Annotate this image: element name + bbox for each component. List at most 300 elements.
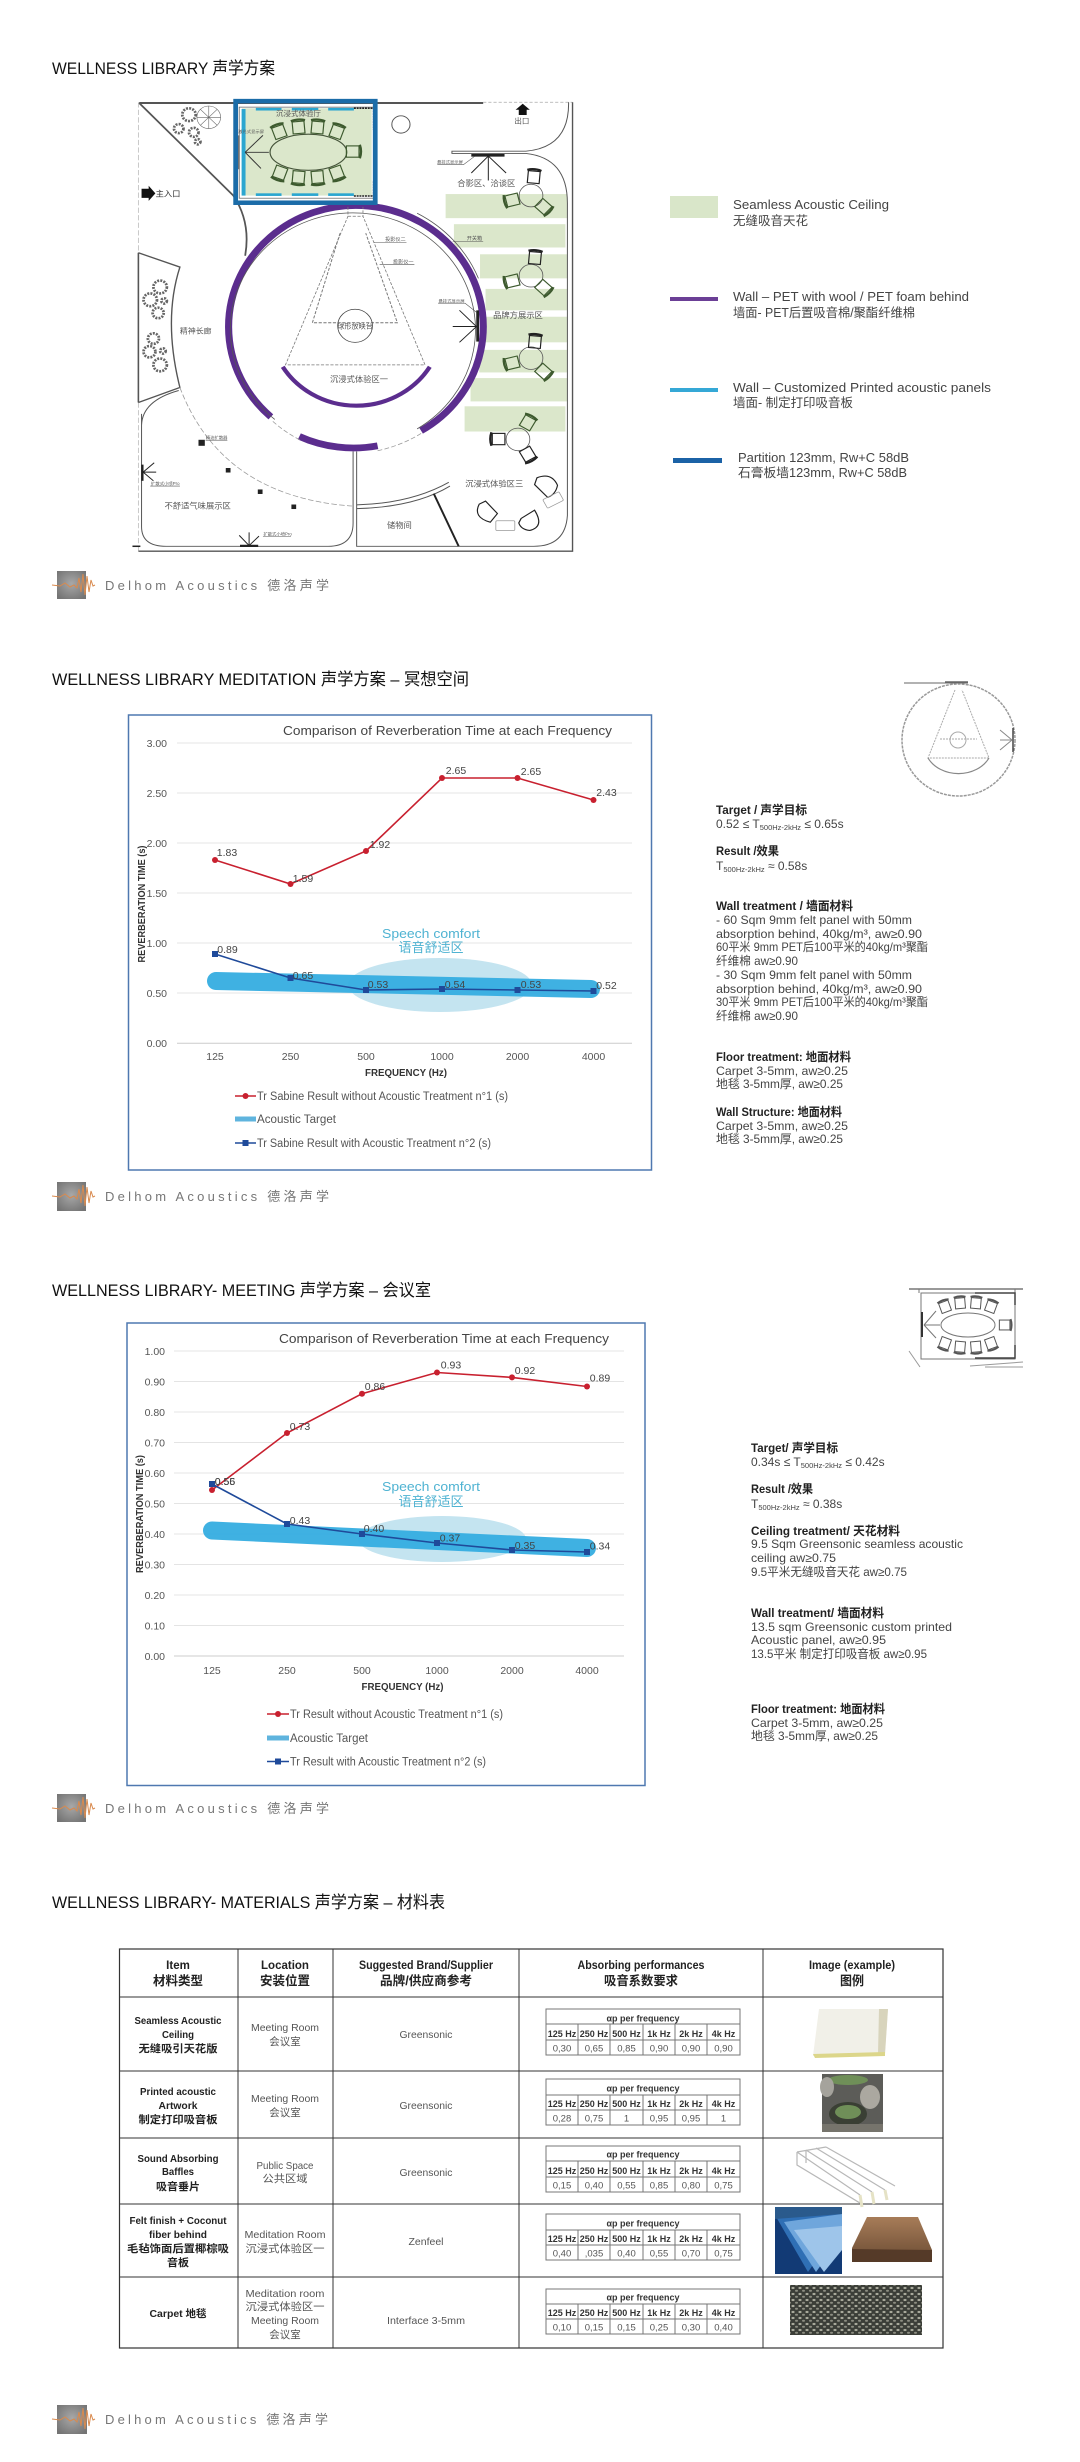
x axis labels: 125 bbox=[203, 1665, 221, 1677]
column: locations: 沉浸式体验区一 bbox=[246, 2300, 325, 2313]
meeting room with blue partition: 激光式显示屏 bbox=[238, 128, 265, 135]
sub-table: printed artwork absorption bbox=[546, 2079, 740, 2125]
table header: Image (example) bbox=[809, 1960, 895, 1972]
column: item names: Baffles bbox=[162, 2166, 194, 2178]
legend item: seamless ceiling: 无缝吸音天花 bbox=[733, 213, 808, 228]
x axis labels: 250 bbox=[278, 1665, 296, 1677]
legend: floor plan materials bbox=[670, 196, 991, 480]
sub-table: printed artwork absorption: 0,95 bbox=[682, 2114, 700, 2124]
text block: meditation specifications: 纤维棉 aw≥0.90 bbox=[716, 1009, 798, 1023]
logo: delhom acoustics 3 bbox=[52, 1794, 329, 1822]
legend item: seamless ceiling bbox=[670, 196, 889, 228]
floor plan room labels: 沉浸式体验区三 bbox=[465, 479, 523, 488]
x axis labels bbox=[206, 1051, 605, 1079]
table header: 材料类型 bbox=[153, 1973, 203, 1988]
x axis labels: FREQUENCY (Hz) bbox=[362, 1682, 444, 1693]
column: suppliers: Zenfeel bbox=[408, 2236, 444, 2248]
y axis title: REVERBERATION TIME (s) bbox=[137, 846, 148, 962]
logo: delhom acoustics 1: Delhom Acoustics 德洛声学 bbox=[105, 578, 329, 593]
text block: meditation specifications: 地毯 3-5mm厚, aw≥0.25 bbox=[716, 1077, 843, 1091]
sub-table: baffles absorption bbox=[546, 2146, 740, 2192]
text block: meditation specifications: ≈ 0.58s bbox=[765, 859, 807, 873]
column: locations: 沉浸式体验区一 bbox=[246, 2242, 325, 2255]
speakers and fixtures bbox=[142, 155, 506, 546]
table groups bbox=[506, 184, 543, 451]
sub-table: baffles absorption: 0,75 bbox=[714, 2180, 733, 2192]
sub-table: carpet absorption: 0,15 bbox=[585, 2322, 603, 2334]
sub-table: felt absorption: 250 Hz bbox=[580, 2234, 609, 2244]
y axis labels: 1.00 bbox=[147, 938, 167, 950]
column: item names: 音板 bbox=[167, 2256, 190, 2269]
y axis labels: 0.30 bbox=[145, 1560, 165, 1572]
data labels: 0.52 bbox=[596, 980, 617, 992]
image: coconut fiber board bbox=[852, 2217, 932, 2262]
column: locations: 公共区域 bbox=[262, 2172, 308, 2185]
text block: meditation specifications: 30平米 9mm PET后100平米的40kg/m³聚酯 bbox=[716, 994, 928, 1009]
floor plan room labels: 扩散式小喷Pro bbox=[151, 480, 180, 487]
legend item: PET wall bbox=[670, 290, 969, 320]
column: item names: 无缝吸引天花版 bbox=[138, 2042, 218, 2055]
sub-table: printed artwork absorption: 4k Hz bbox=[712, 2099, 736, 2109]
column: locations bbox=[244, 2022, 326, 2341]
acoustic target band bbox=[212, 1530, 587, 1548]
data labels: 1.92 bbox=[370, 839, 390, 851]
chart legend: Tr Sabine Result without Acoustic Treatment n°1 (s) bbox=[257, 1091, 508, 1103]
data labels bbox=[215, 1360, 610, 1552]
data labels: 0.89 bbox=[217, 944, 238, 956]
sub-table: felt absorption: 125 Hz bbox=[548, 2234, 577, 2244]
floor plan room labels: 不舒适气味展示区 bbox=[165, 500, 231, 510]
text block: meditation specifications: Wall Structure: 地面材料 bbox=[716, 1104, 842, 1119]
speech comfort zone: 语音舒适区 bbox=[398, 1494, 464, 1509]
text block: meeting specifications: ceiling aw≥0.75 bbox=[751, 1551, 836, 1565]
sub-table: seamless ceiling absorption: 500 Hz bbox=[612, 2029, 641, 2039]
image: baffles bbox=[797, 2147, 895, 2207]
sub-table: carpet absorption: 125 Hz bbox=[548, 2308, 577, 2318]
x axis labels: FREQUENCY (Hz) bbox=[365, 1068, 447, 1079]
chart: meeting reverberation time bbox=[127, 1323, 645, 1786]
x axis labels: 125 bbox=[206, 1051, 224, 1063]
sub-table: carpet absorption bbox=[546, 2289, 740, 2334]
sub-table: baffles absorption: 0,15 bbox=[553, 2180, 571, 2192]
text block: meditation specifications: Wall treatment / 墙面材料 bbox=[716, 898, 853, 913]
arrow: main entrance: 主入口 bbox=[156, 189, 180, 198]
floor plan room labels bbox=[151, 159, 543, 537]
y axis labels: 2.00 bbox=[147, 838, 167, 850]
arrow: exit: 出口 bbox=[514, 116, 529, 125]
plants bbox=[144, 106, 221, 371]
sub-table: carpet absorption: 4k Hz bbox=[712, 2308, 736, 2318]
materials table bbox=[120, 1949, 943, 2348]
text block: meditation specifications: - 30 Sqm 9mm felt panel with 50mm bbox=[716, 968, 912, 982]
sub-table: baffles absorption: 125 Hz bbox=[548, 2166, 577, 2176]
column: locations: Meditation Room bbox=[244, 2229, 326, 2241]
sub-table: seamless ceiling absorption bbox=[546, 2009, 740, 2055]
column: item names: Seamless Acoustic bbox=[134, 2015, 222, 2027]
text block: meditation specifications: 纤维棉 aw≥0.90 bbox=[716, 954, 798, 968]
text block: meditation specifications: 500Hz-2kHz bbox=[760, 823, 801, 832]
sub-table: baffles absorption: αp per frequency bbox=[606, 2150, 680, 2160]
table header: Item bbox=[166, 1960, 190, 1972]
sub-table: seamless ceiling absorption: 1k Hz bbox=[647, 2029, 671, 2039]
image: ceiling panel bbox=[813, 2009, 888, 2058]
table header: 图例 bbox=[840, 1973, 864, 1988]
y axis labels: 0.50 bbox=[147, 988, 167, 1000]
text block: meditation specifications: 地毯 3-5mm厚, aw≥0.25 bbox=[716, 1132, 843, 1146]
y axis labels: 0.10 bbox=[145, 1620, 165, 1632]
text block: meeting specifications: Acoustic panel, aw≥0.95 bbox=[751, 1633, 886, 1647]
data labels: 0.43 bbox=[290, 1515, 310, 1527]
sub-table: baffles absorption: 0,55 bbox=[617, 2180, 636, 2192]
sub-table: carpet absorption: 2k Hz bbox=[679, 2308, 703, 2318]
sub-table: printed artwork absorption: 1k Hz bbox=[647, 2099, 671, 2109]
text block: meeting specifications: Floor treatment: 地面材料 bbox=[751, 1701, 885, 1716]
text block: meeting specifications: 13.5 sqm Greensonic custom printed bbox=[751, 1620, 952, 1634]
meeting room with blue partition bbox=[236, 101, 375, 203]
speech comfort zone: Speech comfort bbox=[382, 926, 480, 941]
data labels: 0.37 bbox=[440, 1532, 460, 1544]
sub-table: seamless ceiling absorption: 0,85 bbox=[617, 2044, 636, 2054]
floor plan room labels: 扩散式小喷Pro bbox=[263, 530, 292, 537]
x axis labels: 250 bbox=[282, 1051, 299, 1063]
acoustic target band bbox=[216, 981, 591, 989]
logo: delhom acoustics 2 bbox=[52, 1182, 329, 1211]
sub-table: seamless ceiling absorption: 4k Hz bbox=[712, 2029, 736, 2039]
sub-table: felt absorption: 0,70 bbox=[682, 2248, 700, 2260]
floor plan room labels: 精神长廊 bbox=[180, 325, 212, 335]
panel: ceiling strips bbox=[446, 194, 567, 432]
text block: meeting specifications: T bbox=[751, 1497, 758, 1511]
column: suppliers: Greensonic bbox=[400, 2167, 452, 2179]
sub-table: printed artwork absorption: 0,95 bbox=[650, 2114, 668, 2124]
sub-table: carpet absorption: 0,15 bbox=[617, 2322, 636, 2334]
data labels: 0.65 bbox=[293, 970, 313, 982]
text block: meditation specifications: T bbox=[716, 859, 723, 873]
sub-table: carpet absorption: αp per frequency bbox=[606, 2292, 680, 2302]
sub-table: baffles absorption: 1k Hz bbox=[647, 2166, 671, 2176]
sub-table: seamless ceiling absorption: 2k Hz bbox=[679, 2029, 703, 2039]
sub-table: felt absorption: 0,55 bbox=[650, 2248, 668, 2260]
sub-table: carpet absorption: 0,25 bbox=[650, 2322, 668, 2334]
table header: Location bbox=[261, 1960, 309, 1972]
sub-table: carpet absorption: 0,10 bbox=[553, 2322, 571, 2334]
building walls bbox=[132, 102, 573, 551]
text block: meditation specifications bbox=[716, 802, 928, 1146]
y axis labels: 0.50 bbox=[145, 1498, 165, 1510]
column: item names: Printed acoustic bbox=[140, 2086, 216, 2098]
data labels: 0.89 bbox=[590, 1372, 610, 1384]
arrow: main entrance bbox=[142, 186, 180, 201]
purple circular wall bbox=[229, 206, 483, 451]
column: suppliers: Greensonic bbox=[400, 2029, 452, 2041]
sub-table: seamless ceiling absorption: 0,90 bbox=[682, 2044, 700, 2054]
floor plan room labels: 投影仪二 bbox=[385, 236, 406, 243]
y axis title: REVERBERATION TIME (s) bbox=[135, 1455, 146, 1573]
text block: meeting specifications bbox=[751, 1440, 963, 1743]
chart: meditation reverberation time bbox=[128, 715, 652, 1170]
column: suppliers bbox=[387, 2029, 465, 2327]
floor plan room labels: 球形放映台 bbox=[337, 322, 373, 330]
mini plan: meditation circle bbox=[902, 682, 1015, 796]
text block: meditation specifications: 60平米 9mm PET后100平米的40kg/m³聚酯 bbox=[716, 939, 928, 954]
sub-table: printed artwork absorption: 250 Hz bbox=[580, 2099, 609, 2109]
mini plan: meeting room bbox=[909, 1289, 1023, 1367]
y axis labels: 0.90 bbox=[145, 1376, 165, 1388]
table header: 品牌/供应商参考 bbox=[380, 1973, 472, 1988]
sub-table: felt absorption: 0,40 bbox=[617, 2248, 636, 2260]
legend item: printed panels: Wall – Customized Printed acoustic panels bbox=[733, 381, 991, 395]
x axis labels: 2000 bbox=[506, 1051, 529, 1063]
meeting room with blue partition: 沉浸式体验厅 bbox=[276, 109, 321, 118]
title: materials: WELLNESS LIBRARY- MATERIALS 声学方案 – 材料表 bbox=[52, 1893, 445, 1912]
logo: delhom acoustics 2: Delhom Acoustics 德洛声学 bbox=[105, 1189, 329, 1204]
y axis labels: 0.70 bbox=[145, 1438, 165, 1450]
data labels: 0.53 bbox=[368, 979, 388, 991]
chart legend: Acoustic Target bbox=[290, 1733, 369, 1745]
sub-table: felt absorption: αp per frequency bbox=[606, 2218, 680, 2228]
projection cone bbox=[285, 207, 425, 365]
sub-table: baffles absorption: 0,40 bbox=[585, 2180, 603, 2192]
text block: meeting specifications: 0.34s ≤ T bbox=[751, 1455, 801, 1469]
floor plan room labels: 品牌方展示区 bbox=[493, 310, 543, 320]
blue series bbox=[212, 951, 596, 994]
title: wellness library: WELLNESS LIBRARY 声学方案 bbox=[52, 59, 275, 78]
column: item names: Carpet 地毯 bbox=[150, 2307, 207, 2320]
title: meeting: WELLNESS LIBRARY- MEETING 声学方案 – 会议室 bbox=[52, 1281, 431, 1300]
sub-table: baffles absorption: 2k Hz bbox=[679, 2166, 703, 2176]
column: suppliers: Greensonic bbox=[400, 2100, 452, 2112]
y axis labels: 3.00 bbox=[147, 738, 167, 750]
text block: meeting specifications: Carpet 3-5mm, aw≥0.25 bbox=[751, 1716, 883, 1730]
text block: meeting specifications: 500Hz-2kHz bbox=[758, 1503, 800, 1512]
text block: meditation specifications: 0.52 ≤ T bbox=[716, 817, 760, 831]
y axis labels: 0.00 bbox=[145, 1651, 165, 1663]
image: carpet bbox=[790, 2285, 922, 2335]
arrow: exit bbox=[514, 104, 530, 125]
legend item: PET wall: Wall – PET with wool / PET foam behind bbox=[733, 290, 969, 304]
data labels: 1.83 bbox=[217, 847, 237, 859]
column: item names: Sound Absorbing bbox=[138, 2153, 218, 2165]
x axis labels bbox=[203, 1665, 599, 1693]
sub-table: felt absorption: 0,40 bbox=[553, 2248, 571, 2260]
sub-table: baffles absorption: 0,85 bbox=[650, 2180, 668, 2192]
data labels bbox=[217, 765, 617, 992]
data labels: 0.34 bbox=[590, 1540, 610, 1552]
sub-table: seamless ceiling absorption: 0,65 bbox=[585, 2044, 603, 2054]
y axis labels: 0.40 bbox=[145, 1529, 165, 1541]
sub-table: carpet absorption: 0,40 bbox=[714, 2322, 733, 2334]
text block: meditation specifications: 500Hz-2kHz bbox=[723, 865, 765, 874]
red series bbox=[209, 1370, 590, 1493]
sub-table: felt absorption: 4k Hz bbox=[712, 2234, 736, 2244]
y axis labels: 1.50 bbox=[147, 888, 167, 900]
sub-table: seamless ceiling absorption: αp per frequency bbox=[606, 2014, 680, 2024]
x axis labels: 2000 bbox=[500, 1665, 524, 1677]
data labels: 0.53 bbox=[521, 979, 541, 991]
column: locations: Meditation room bbox=[246, 2288, 325, 2300]
data labels: 0.35 bbox=[515, 1540, 535, 1552]
data labels: 0.54 bbox=[445, 979, 465, 991]
red series bbox=[212, 775, 596, 887]
text block: meeting specifications: 13.5平米 制定打印吸音板 aw≥0.95 bbox=[751, 1646, 927, 1661]
x axis labels: 1000 bbox=[425, 1665, 449, 1677]
text block: meeting specifications: 9.5 Sqm Greensonic seamless acoustic bbox=[751, 1537, 963, 1551]
text block: meditation specifications: Floor treatment: 地面材料 bbox=[716, 1049, 851, 1064]
chart legend: Tr Sabine Result with Acoustic Treatment n°2 (s) bbox=[257, 1138, 491, 1150]
blue series bbox=[209, 1481, 590, 1555]
sub-table: baffles absorption: 0,80 bbox=[682, 2180, 700, 2192]
sub-table: printed artwork absorption: 2k Hz bbox=[679, 2099, 703, 2109]
sub-table: seamless ceiling absorption: 0,90 bbox=[650, 2044, 668, 2054]
legend item: PET wall: 墙面- PET后置吸音棉/聚酯纤维棉 bbox=[733, 305, 915, 320]
speech comfort zone: Speech comfort bbox=[382, 1479, 480, 1494]
logo: delhom acoustics 3: Delhom Acoustics 德洛声学 bbox=[105, 1801, 329, 1816]
y axis labels: 0.20 bbox=[145, 1590, 165, 1602]
sub-table: felt absorption: 500 Hz bbox=[612, 2234, 641, 2244]
sub-table: seamless ceiling absorption: 250 Hz bbox=[580, 2029, 609, 2039]
y axis labels: 2.50 bbox=[147, 788, 167, 800]
text block: meeting specifications: Wall treatment/ 墙面材料 bbox=[751, 1605, 884, 1620]
sub-table: felt absorption: 1k Hz bbox=[647, 2234, 671, 2244]
speech comfort zone bbox=[358, 1479, 526, 1562]
image: blue felt swatches bbox=[775, 2207, 842, 2274]
column: item names bbox=[127, 2015, 230, 2320]
image: printed artwork photo bbox=[820, 2074, 883, 2132]
column: item names: Ceiling bbox=[162, 2029, 194, 2041]
lounge chairs bbox=[477, 476, 564, 530]
text block: meditation specifications: absorption behind, 40kg/m³, aw≥0.90 bbox=[716, 927, 922, 941]
data labels: 0.73 bbox=[290, 1421, 310, 1433]
sub-table: printed artwork absorption: 1 bbox=[624, 2114, 629, 2124]
chart: meeting reverberation time: Comparison of Reverberation Time at each Frequency bbox=[279, 1331, 610, 1346]
legend item: seamless ceiling: Seamless Acoustic Ceiling bbox=[733, 198, 889, 212]
text block: meeting specifications: Result /效果 bbox=[751, 1481, 813, 1496]
floor plan room labels: 合影区、洽谈区 bbox=[457, 178, 515, 188]
chart: meditation reverberation time: Comparison of Reverberation Time at each Frequency bbox=[283, 723, 613, 738]
column: suppliers: Interface 3-5mm bbox=[387, 2315, 465, 2327]
sub-table: seamless ceiling absorption: 125 Hz bbox=[548, 2029, 577, 2039]
floor plan room labels: 开关箱 bbox=[467, 235, 482, 242]
text block: meeting specifications: Ceiling treatment/ 天花材料 bbox=[751, 1523, 900, 1538]
logo: delhom acoustics 4 bbox=[52, 2405, 328, 2434]
chart legend: Acoustic Target bbox=[257, 1114, 337, 1126]
x axis labels: 500 bbox=[357, 1051, 375, 1063]
column: item names: 制定打印吸音板 bbox=[138, 2113, 218, 2126]
data labels: 2.43 bbox=[596, 787, 617, 799]
table header: Suggested Brand/Supplier bbox=[359, 1960, 493, 1972]
sub-table: printed artwork absorption: 0,28 bbox=[553, 2114, 571, 2124]
x axis labels: 500 bbox=[353, 1665, 371, 1677]
text block: meeting specifications: 地毯 3-5mm厚, aw≥0.25 bbox=[751, 1729, 878, 1743]
column: locations: 会议室 bbox=[269, 2106, 301, 2119]
table header: 吸音系数要求 bbox=[604, 1973, 678, 1988]
column: locations: Public Space bbox=[256, 2160, 314, 2172]
chart legend bbox=[267, 1709, 503, 1768]
sub-table: felt absorption: 0,75 bbox=[714, 2248, 733, 2260]
y axis labels: 0.00 bbox=[147, 1038, 167, 1050]
column: item names: Artwork bbox=[158, 2100, 198, 2112]
chart legend: Tr Result without Acoustic Treatment n°1 (s) bbox=[290, 1709, 503, 1721]
x axis labels: 1000 bbox=[430, 1051, 454, 1063]
text block: meeting specifications: Target/ 声学目标 bbox=[751, 1440, 838, 1455]
text block: meeting specifications: 500Hz-2kHz bbox=[801, 1461, 842, 1470]
chart legend: Tr Result with Acoustic Treatment n°2 (s) bbox=[290, 1756, 486, 1768]
column: locations: 会议室 bbox=[269, 2328, 301, 2341]
text block: meeting specifications: ≈ 0.38s bbox=[800, 1497, 842, 1511]
sub-table: carpet absorption: 500 Hz bbox=[612, 2308, 641, 2318]
table header bbox=[153, 1960, 895, 1988]
sub-table: felt absorption: 2k Hz bbox=[679, 2234, 703, 2244]
data labels: 2.65 bbox=[521, 766, 541, 778]
sub-table: baffles absorption: 500 Hz bbox=[612, 2166, 641, 2176]
floor plan room labels: 沉浸式体验区一 bbox=[330, 374, 388, 384]
y axis labels: 0.60 bbox=[145, 1468, 165, 1480]
sub-table: carpet absorption: 0,30 bbox=[682, 2322, 700, 2334]
text block: meditation specifications: - 60 Sqm 9mm felt panel with 50mm bbox=[716, 913, 912, 927]
sub-table: printed artwork absorption: 1 bbox=[721, 2114, 726, 2124]
sub-table: baffles absorption: 4k Hz bbox=[712, 2166, 736, 2176]
sub-table: printed artwork absorption: 500 Hz bbox=[612, 2099, 641, 2109]
floor plan room labels: 悬挂式显示屏 bbox=[437, 159, 464, 166]
column: item names: Felt finish + Coconut bbox=[130, 2215, 227, 2227]
table grid bbox=[120, 1949, 943, 2348]
sub-table: seamless ceiling absorption: 0,90 bbox=[714, 2044, 733, 2054]
sub-table: seamless ceiling absorption: 0,30 bbox=[553, 2044, 571, 2054]
legend item: printed panels: 墙面- 制定打印吸音板 bbox=[733, 395, 853, 410]
column: locations: 会议室 bbox=[269, 2035, 301, 2048]
sub-table: printed artwork absorption: αp per frequency bbox=[606, 2084, 680, 2094]
y axis labels bbox=[145, 1346, 165, 1663]
column: item names: fiber behind bbox=[149, 2229, 207, 2241]
legend item: partition bbox=[673, 451, 909, 480]
title: meditation: WELLNESS LIBRARY MEDITATION 声学方案 – 冥想空间 bbox=[52, 670, 469, 689]
data labels: 2.65 bbox=[446, 765, 466, 777]
sub-table: printed artwork absorption: 125 Hz bbox=[548, 2099, 577, 2109]
data labels: 0.93 bbox=[441, 1360, 461, 1372]
x axis labels: 4000 bbox=[575, 1665, 599, 1677]
column: locations: Meeting Room bbox=[251, 2093, 319, 2105]
column: item names: 毛毡饰面后置椰棕吸 bbox=[127, 2242, 230, 2255]
speech comfort zone bbox=[348, 926, 532, 1012]
floor plan room labels: 投影仪一 bbox=[393, 258, 414, 265]
y axis labels: 0.80 bbox=[145, 1407, 165, 1419]
text block: meditation specifications: Result /效果 bbox=[716, 843, 779, 858]
floor plan room labels: 储物间 bbox=[387, 520, 412, 530]
data labels: 0.40 bbox=[364, 1523, 384, 1535]
sub-table: carpet absorption: 250 Hz bbox=[580, 2308, 609, 2318]
sub-table: felt absorption: ,035 bbox=[585, 2248, 603, 2260]
legend item: partition: Partition 123mm, Rw+C 58dB bbox=[738, 451, 909, 465]
column: locations: Meeting Room bbox=[251, 2022, 319, 2034]
table header: Absorbing performances bbox=[578, 1960, 704, 1972]
logo: delhom acoustics 4: Delhom Acoustics 德洛声学 bbox=[105, 2412, 328, 2427]
table header: 安装位置 bbox=[260, 1973, 310, 1988]
logo: delhom acoustics 1 bbox=[52, 571, 329, 599]
speech comfort zone: 语音舒适区 bbox=[398, 940, 464, 955]
data labels: 0.55 bbox=[215, 1476, 235, 1488]
y axis labels: 1.00 bbox=[145, 1346, 165, 1358]
sub-table: baffles absorption: 250 Hz bbox=[580, 2166, 609, 2176]
data labels: 1.59 bbox=[293, 873, 313, 885]
x axis labels: 4000 bbox=[582, 1051, 605, 1063]
sub-table: printed artwork absorption: 0,75 bbox=[585, 2114, 603, 2124]
y axis labels bbox=[147, 738, 167, 1050]
data labels: 0.86 bbox=[365, 1381, 385, 1393]
text block: meeting specifications: 9.5平米无缝吸音天花 aw≥0.75 bbox=[751, 1564, 907, 1579]
text block: meditation specifications: ≤ 0.65s bbox=[801, 817, 844, 831]
floor plan bbox=[132, 101, 573, 551]
sub-table: carpet absorption: 1k Hz bbox=[647, 2308, 671, 2318]
